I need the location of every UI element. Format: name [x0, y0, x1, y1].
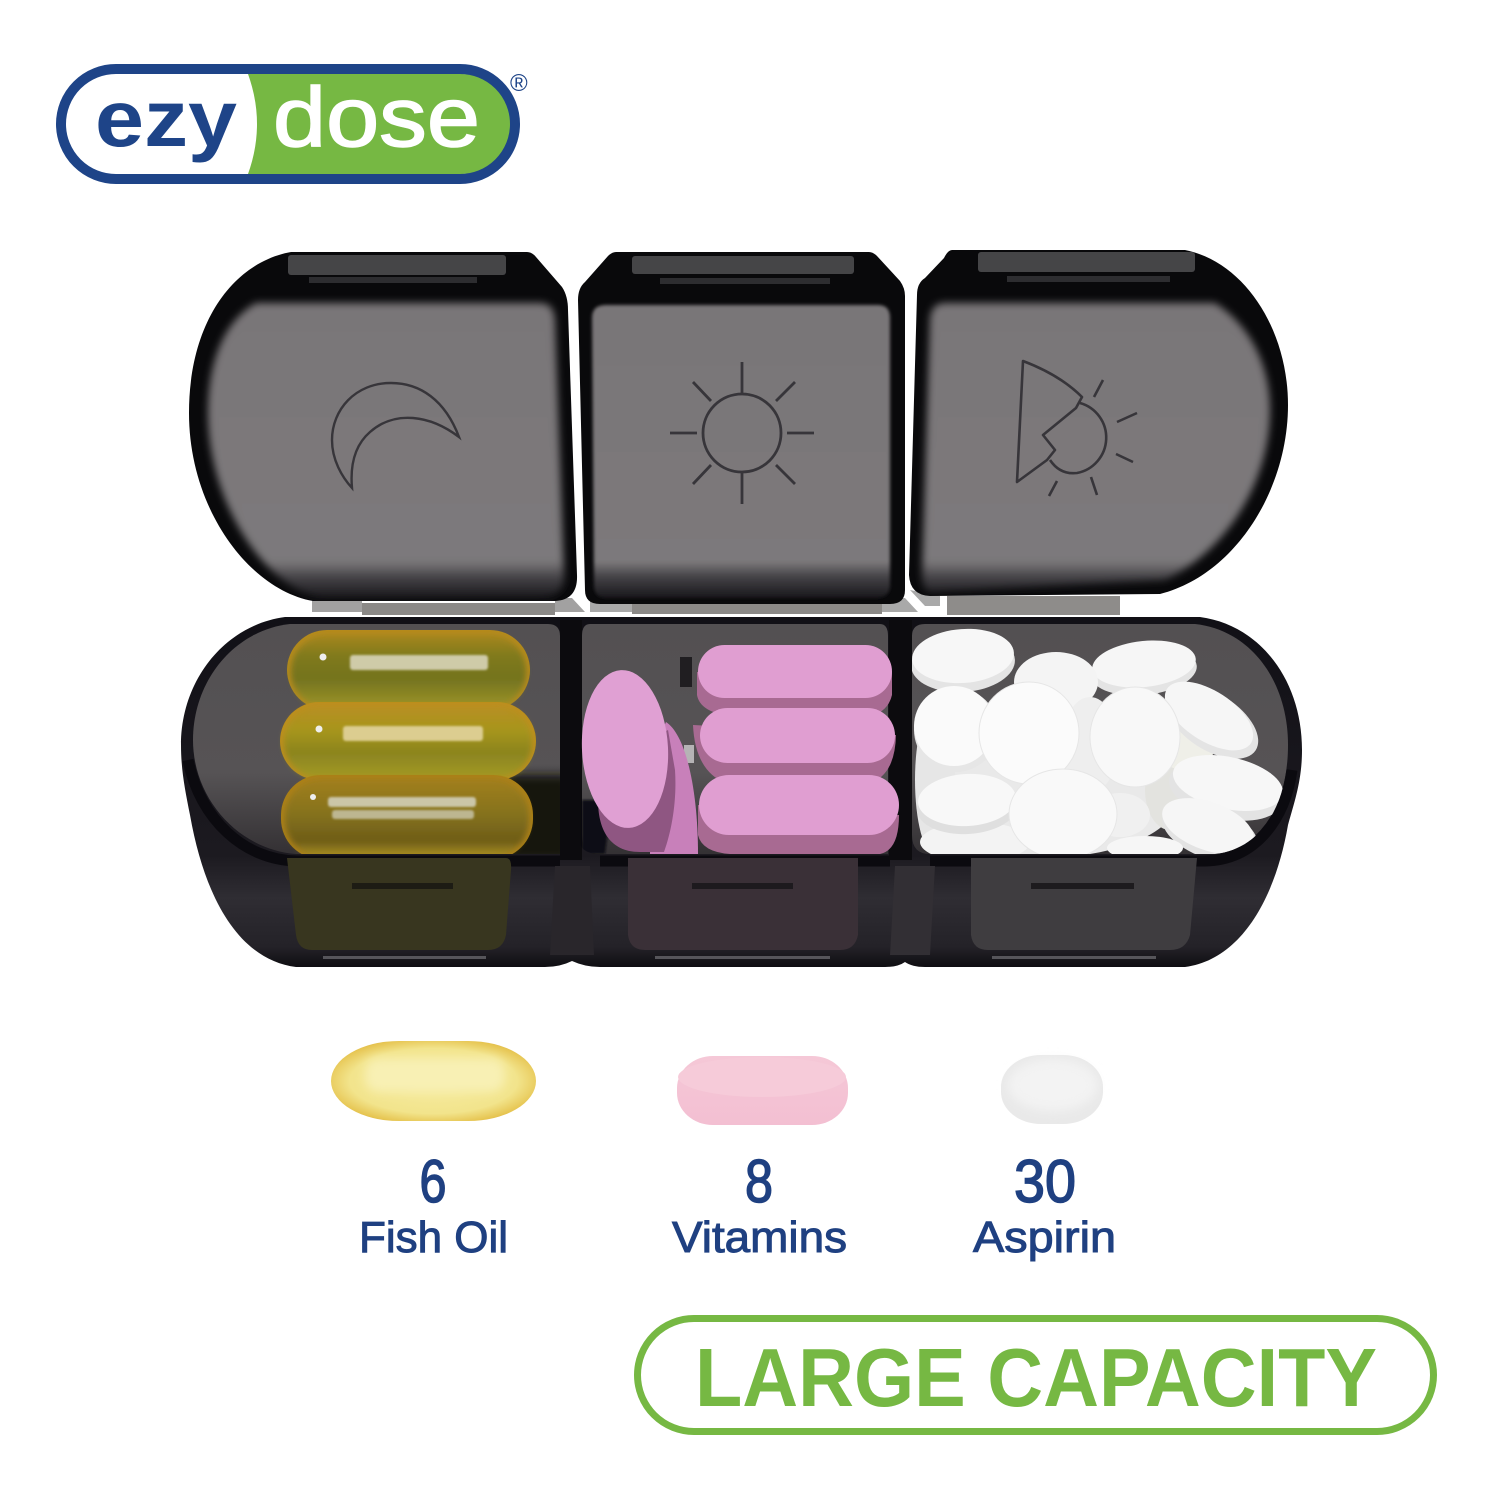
vitamin sample tablet — [677, 1056, 848, 1125]
fish oil capsules in box — [280, 630, 570, 860]
label: vitamins count — [672, 1148, 847, 1262]
front window: left — [287, 858, 511, 959]
icon: sun — [670, 362, 814, 504]
tablets middle row — [914, 682, 1258, 786]
capsule top — [287, 630, 530, 710]
compartment interior: right — [912, 624, 1288, 854]
logo: ezy dose: dose — [273, 70, 480, 164]
label: fish oil count — [359, 1148, 508, 1262]
vitamin tablet bottom — [698, 775, 899, 854]
tablets back row — [912, 628, 1197, 708]
vitamin tablet standing behind — [650, 722, 698, 854]
icon: moon — [332, 383, 459, 488]
compartment interior: left — [193, 624, 560, 854]
label: fish oil count: 6 — [420, 1148, 446, 1215]
lid: moon compartment — [189, 252, 577, 601]
front window: middle — [628, 858, 858, 959]
capsule middle — [280, 702, 536, 780]
icon: mountain and sun — [1017, 361, 1137, 496]
vitamin tablet top — [697, 645, 892, 716]
label: vitamins count: Vitamins — [672, 1213, 847, 1262]
label: aspirin count: 30 — [1014, 1148, 1076, 1215]
vitamins in box — [578, 645, 899, 854]
vitamin tablet standing front — [578, 668, 675, 852]
front window: right — [971, 858, 1197, 959]
label: fish oil count: Fish Oil — [359, 1213, 508, 1262]
tablets front row — [918, 755, 1282, 854]
aspirin sample tablet — [1001, 1055, 1103, 1124]
logo: ezy dose — [61, 69, 528, 179]
label: aspirin count: Aspirin — [973, 1213, 1116, 1262]
logo: ezy dose: ezy — [95, 74, 238, 163]
lid: sunrise compartment — [909, 250, 1288, 596]
lid: sun compartment — [578, 252, 905, 604]
logo: ezy dose: ® — [510, 70, 528, 97]
label: aspirin count — [973, 1148, 1116, 1262]
vitamin tablet middle — [693, 708, 896, 783]
label: vitamins count: 8 — [745, 1148, 773, 1215]
compartment lower rim — [188, 760, 1292, 861]
compartment interior: middle — [582, 624, 888, 854]
badge: large capacity: LARGE CAPACITY — [695, 1331, 1377, 1424]
pill box base — [181, 617, 1302, 967]
fish oil sample capsule — [331, 1041, 536, 1121]
capsule bottom — [281, 775, 533, 859]
aspirin tablets in box — [912, 628, 1282, 854]
hinges between lids and base — [312, 590, 1120, 615]
